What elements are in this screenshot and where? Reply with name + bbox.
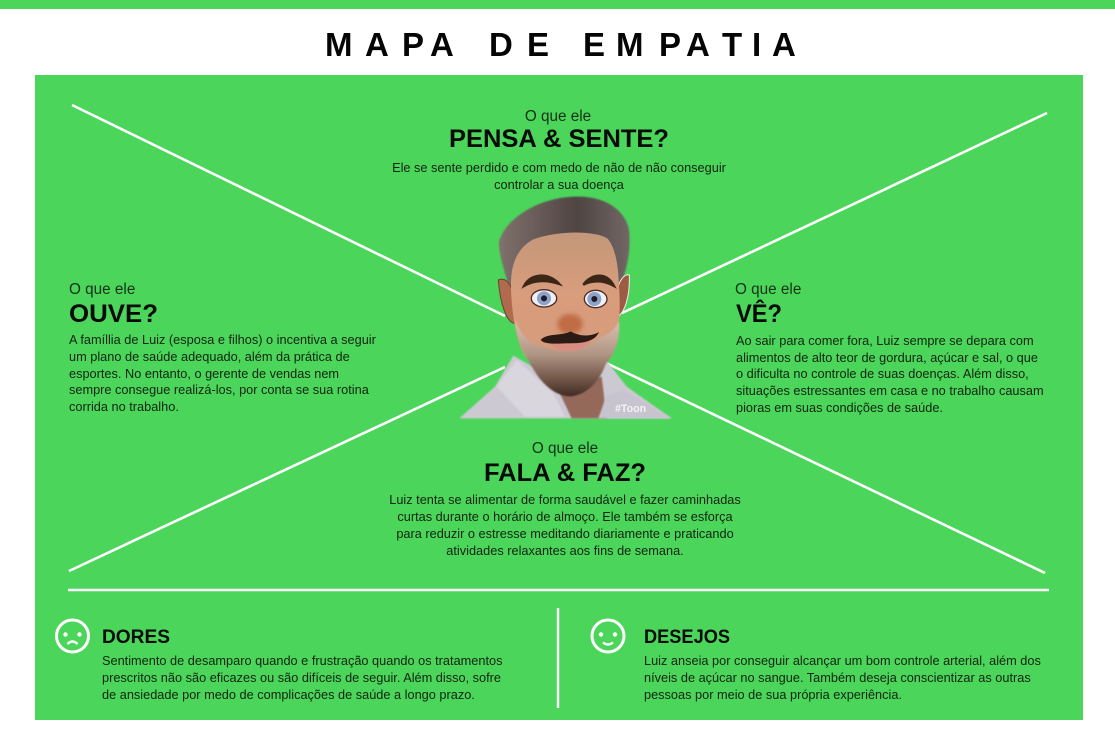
beard [515, 320, 619, 396]
section: ve: o dificulta no controle de suas doenças. Além disso, [736, 366, 1029, 381]
section: ouve: corrida no trabalho. [69, 399, 179, 414]
section: fala e faz [389, 440, 741, 558]
desejos text: níveis de açúcar no sangue. Também deseja conscientizar as outras [644, 670, 1031, 685]
section: ve: pioras em suas condições de saúde. [736, 400, 943, 415]
hair back [499, 197, 630, 290]
eyebrows [524, 276, 559, 286]
desejos text: pessoas por meio de sua própria experiência. [644, 687, 902, 702]
desejos heading: DESEJOS [644, 627, 730, 648]
section: ouve [69, 281, 377, 414]
section: ve [735, 281, 1044, 415]
title: MAPADEEMPATIA [325, 26, 796, 63]
neck [557, 377, 607, 418]
collar right [598, 390, 672, 418]
section: fala e faz: curtas durante o horário de almoço. Ele também se esforça [397, 509, 734, 524]
section: ve: situações estressantes em casa e no trabalho causam [736, 383, 1044, 398]
left eye [531, 290, 557, 307]
moustache [541, 331, 599, 344]
section: ouve: esportes. No entanto, o gerente de vendas nem [69, 366, 339, 381]
section: ouve: um plano de saúde adequado, além da prática de [69, 349, 350, 364]
section: ouve: sempre consegue realizá-los, por conta se sua rotina [69, 382, 370, 397]
section: ve: VÊ? [736, 298, 782, 328]
section: ve: Ao sair para comer fora, Luiz sempre se depara com [736, 333, 1034, 348]
dores text: de ansiedade por medo de complicações de saúde a longo prazo. [102, 687, 475, 702]
desejos block [592, 620, 1041, 702]
right eye [584, 290, 607, 308]
diagonal lines [69, 105, 1047, 573]
dores heading: DORES [102, 627, 170, 648]
section: ouve: OUVE? [69, 300, 158, 328]
dores text: Sentimento de desamparo quando e frustração quando os tratamentos [102, 653, 502, 668]
dores block [56, 620, 502, 702]
desejos text: Luiz anseia por conseguir alcançar um bom controle arterial, além dos [644, 653, 1041, 668]
section: fala e faz: O que ele [532, 440, 598, 457]
vertical divider [557, 608, 559, 708]
watermark: #Toon [615, 403, 646, 415]
desejos text [644, 653, 1041, 702]
section: fala e faz: atividades relaxantes aos fins de semana. [446, 543, 684, 558]
face [511, 232, 620, 376]
lip [550, 340, 592, 351]
ears [498, 279, 515, 323]
section: pensa e sente: Ele se sente perdido e com medo de não de não conseguir [392, 160, 727, 175]
section: ve: alimentos de alto teor de gordura, açúcar e sal, o que [736, 350, 1038, 365]
dores text [102, 653, 502, 702]
nose [557, 314, 583, 334]
horizontal divider [68, 589, 1049, 591]
section: ve: O que ele [735, 281, 801, 298]
section: pensa e sente: O que ele [525, 108, 591, 125]
portrait illustration [459, 197, 672, 418]
section: fala e faz: Luiz tenta se alimentar de forma saudável e fazer caminhadas [389, 492, 741, 507]
section: pensa e sente: PENSA & SENTE? [449, 125, 669, 153]
section: ouve: O que ele [69, 281, 135, 298]
icon: sad face [56, 620, 88, 652]
section: fala e faz: para reduzir o estresse meditando diariamente e praticando [396, 526, 734, 541]
section: pensa e sente: controlar a sua doença [494, 177, 625, 192]
section: pensa e sente [392, 108, 727, 192]
dores text: prescritos não são eficazes ou são difíceis de seguir. Além disso, sofre [102, 670, 501, 685]
top bar [0, 0, 1115, 9]
shirt [459, 356, 672, 418]
icon: happy face [592, 620, 624, 652]
section: fala e faz: FALA & FAZ? [484, 459, 646, 487]
section: ouve: A famíllia de Luiz (esposa e filhos) o incentiva a seguir [69, 332, 377, 347]
